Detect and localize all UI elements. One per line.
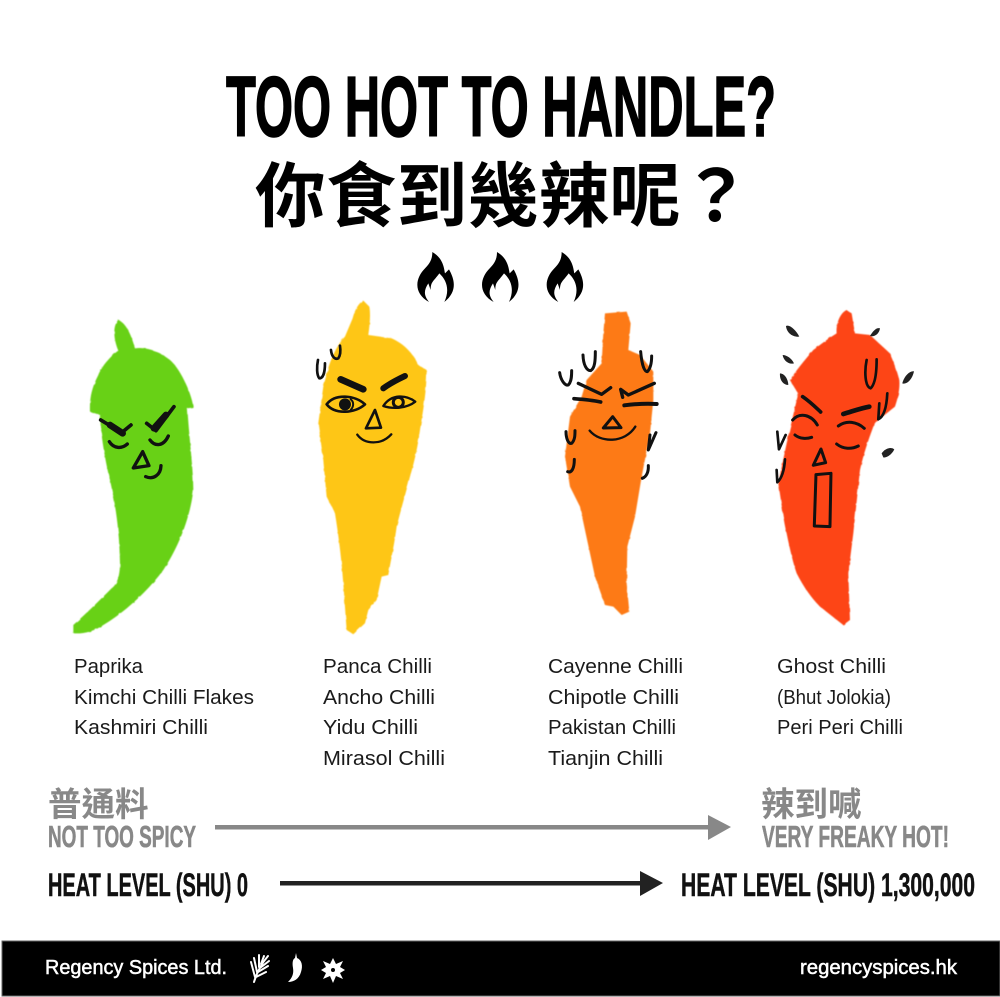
list: column 2: Mirasol Chilli: [323, 748, 445, 770]
chilli: red: [777, 310, 914, 625]
list: column 2: [323, 656, 445, 770]
list: column 4: [777, 656, 903, 739]
footer bar: [2, 941, 1000, 996]
icon: herb sprig: [251, 955, 269, 982]
list: column 2: Panca Chilli: [323, 656, 432, 678]
icon: star spice: [321, 958, 345, 983]
scale label: mild English: NOT TOO SPICY: [48, 819, 196, 854]
list: column 4: Ghost Chilli: [777, 656, 886, 678]
list: column 1: Paprika: [74, 656, 144, 678]
list: column 3: [548, 656, 683, 770]
list: column 1: Kimchi Chilli Flakes: [74, 687, 254, 709]
list: column 2: Yidu Chilli: [323, 717, 418, 739]
list: column 1: Kashmiri Chilli: [74, 717, 208, 739]
list: column 2: Ancho Chilli: [323, 687, 435, 709]
scale label: mild Chinese: 普通料: [48, 787, 148, 824]
heat level start label: HEAT LEVEL (SHU) 0: [48, 867, 248, 903]
list: column 3: Cayenne Chilli: [548, 656, 683, 678]
arrow: grey spice scale: [215, 815, 731, 840]
list: column 3: Chipotle Chilli: [548, 687, 679, 709]
chilli: yellow: [317, 301, 427, 634]
list: column 3: Pakistan Chilli: [548, 717, 676, 739]
list: column 4: (Bhut Jolokia): [777, 687, 891, 709]
list: column 1: [74, 656, 254, 739]
title: Chinese: 你食到幾辣呢？: [255, 157, 751, 236]
list: column 4: Peri Peri Chilli: [777, 717, 903, 739]
footer: company name: Regency Spices Ltd.: [45, 957, 227, 979]
icon: three flames: [417, 252, 583, 302]
scale label: hot Chinese: 辣到喊: [761, 787, 862, 824]
chilli: green: [73, 320, 193, 633]
icon: chilli: [288, 953, 302, 982]
arrow: black heat scale: [280, 871, 663, 896]
footer: website: regencyspices.hk: [800, 957, 958, 979]
list: column 3: Tianjin Chilli: [548, 748, 663, 770]
chilli: orange: [560, 312, 657, 615]
